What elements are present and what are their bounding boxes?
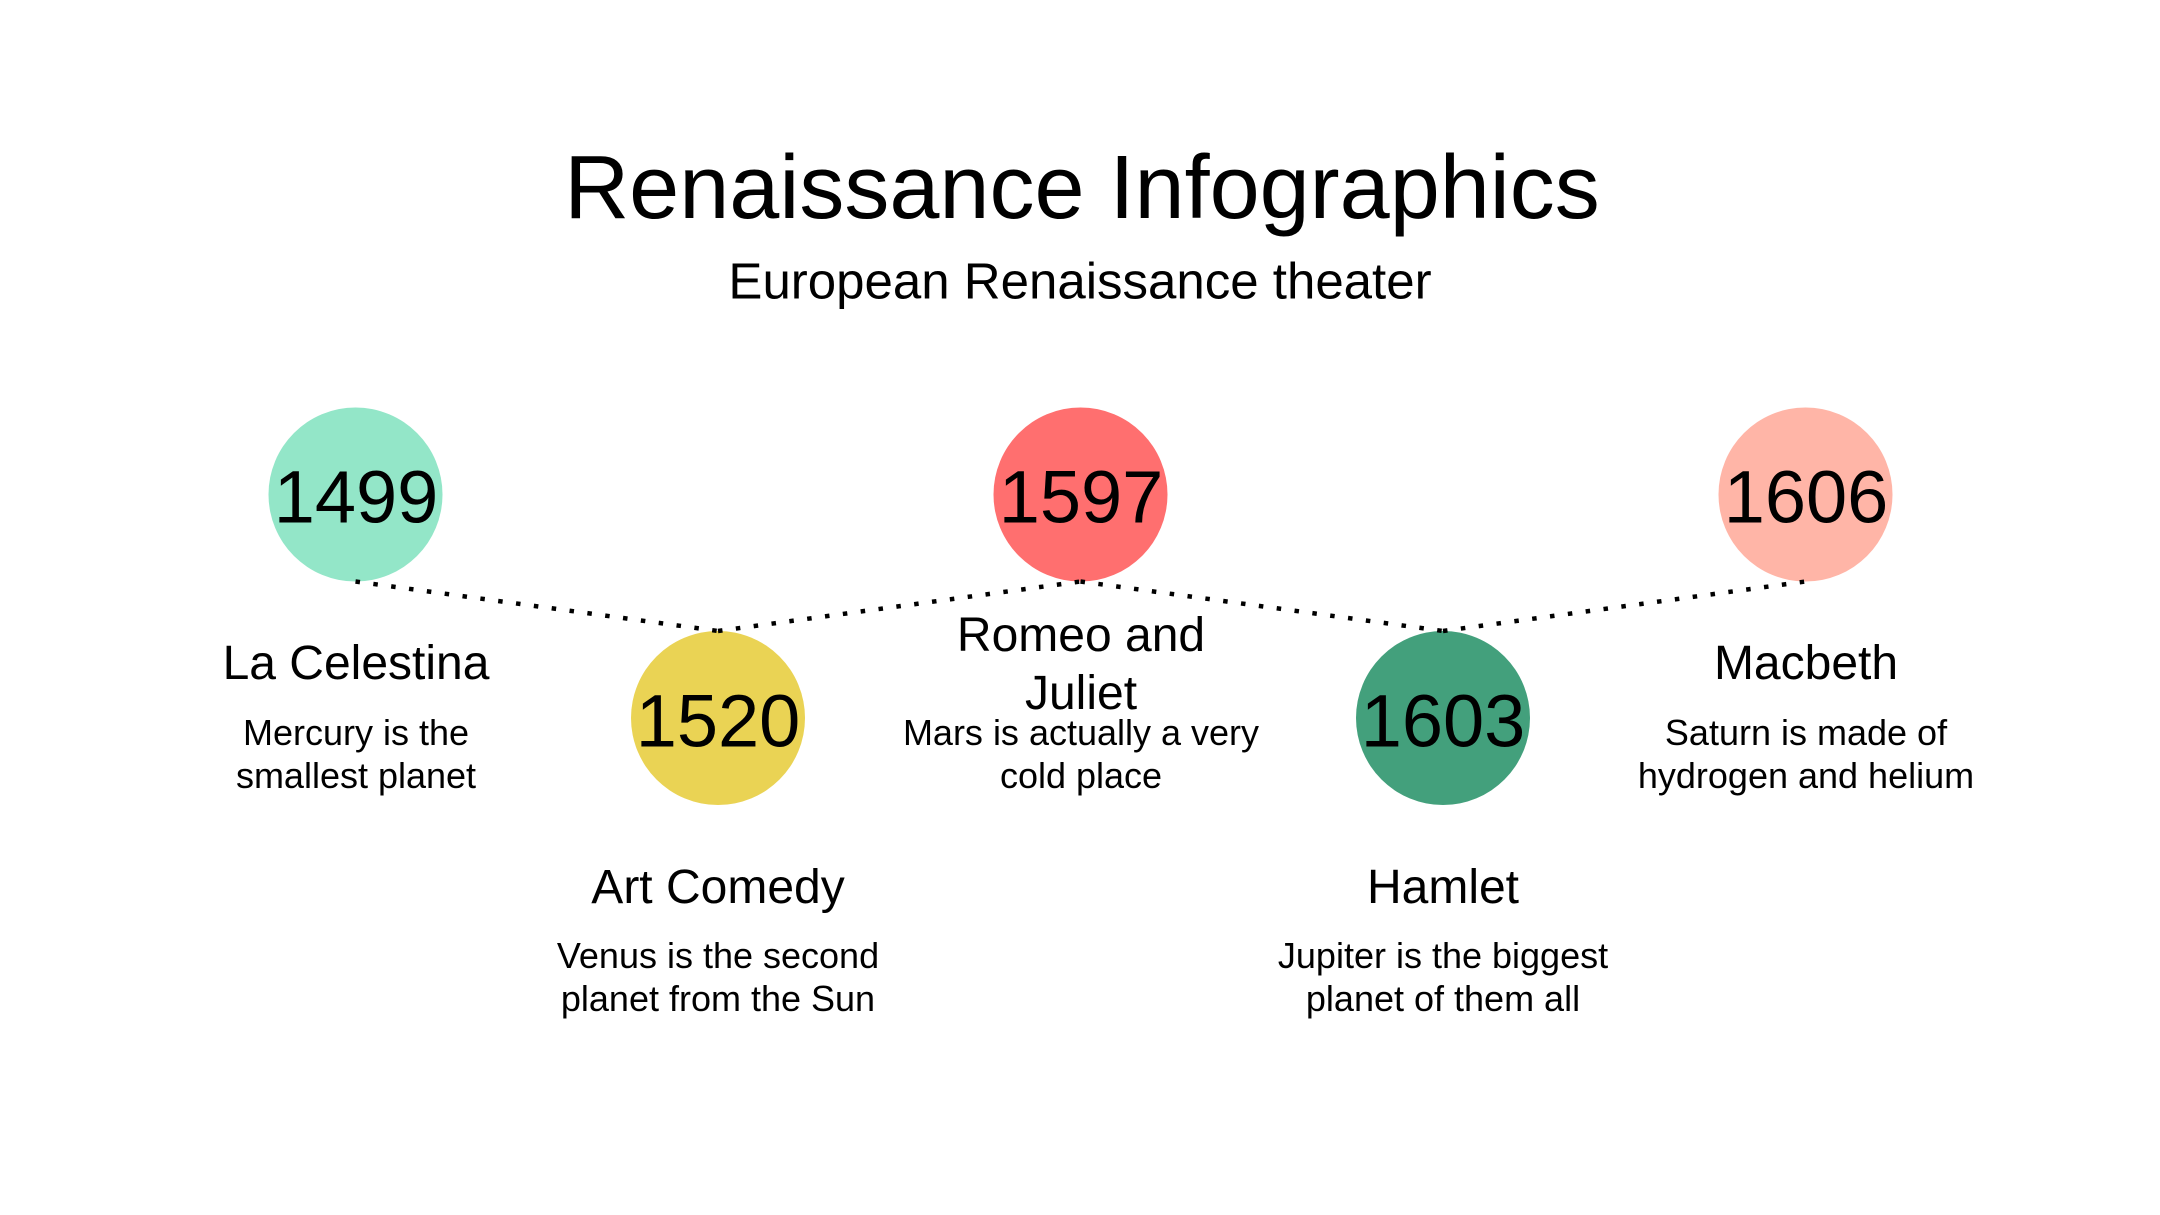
text block: Macbeth: Saturn is made of: [1665, 712, 1948, 753]
text block: La Celestina: La Celestina: [223, 637, 490, 690]
text block: Hamlet: Jupiter is the biggest: [1278, 935, 1608, 976]
panel: 1603 circle: [1356, 631, 1530, 805]
text block: Art Comedy: Art Comedy: [591, 861, 845, 914]
panel: 1597 circle: [994, 408, 1168, 582]
text block: Art Comedy: [557, 861, 879, 1019]
text block: Romeo and Juliet: Romeo and: [957, 609, 1205, 662]
year 1606: 1606: [1724, 456, 1888, 538]
year 1499: 1499: [274, 456, 438, 538]
text block: Macbeth: hydrogen and helium: [1638, 755, 1974, 796]
subtitle: European Renaissance theater: [728, 252, 1432, 310]
text block: Romeo and Juliet: Juliet: [1025, 667, 1137, 720]
text block: La Celestina: Mercury is the: [243, 712, 469, 753]
text block: Art Comedy: Venus is the second: [557, 935, 879, 976]
dotted timeline connector: [356, 582, 1806, 631]
text block: Hamlet: [1278, 861, 1608, 1019]
text block: Hamlet: Hamlet: [1367, 861, 1519, 914]
panel: 1606 circle: [1718, 408, 1892, 582]
text block: Romeo and Juliet: Mars is actually a very: [903, 712, 1259, 753]
panel: 1499 circle: [268, 408, 442, 582]
text block: Art Comedy: planet from the Sun: [561, 978, 875, 1019]
text block: La Celestina: [223, 637, 490, 796]
year 1603: 1603: [1361, 680, 1525, 762]
text block: Macbeth: [1638, 637, 1974, 796]
text block: Hamlet: planet of them all: [1306, 978, 1580, 1019]
text block: Romeo and Juliet: cold place: [1000, 755, 1162, 796]
title: Renaissance Infographics: [564, 138, 1600, 238]
year 1597: 1597: [999, 456, 1163, 538]
year 1520: 1520: [636, 680, 800, 762]
text block: Romeo and Juliet: [903, 609, 1259, 796]
text block: La Celestina: smallest planet: [236, 755, 476, 796]
text block: Macbeth: Macbeth: [1714, 637, 1898, 690]
panel: 1520 circle: [631, 631, 805, 805]
